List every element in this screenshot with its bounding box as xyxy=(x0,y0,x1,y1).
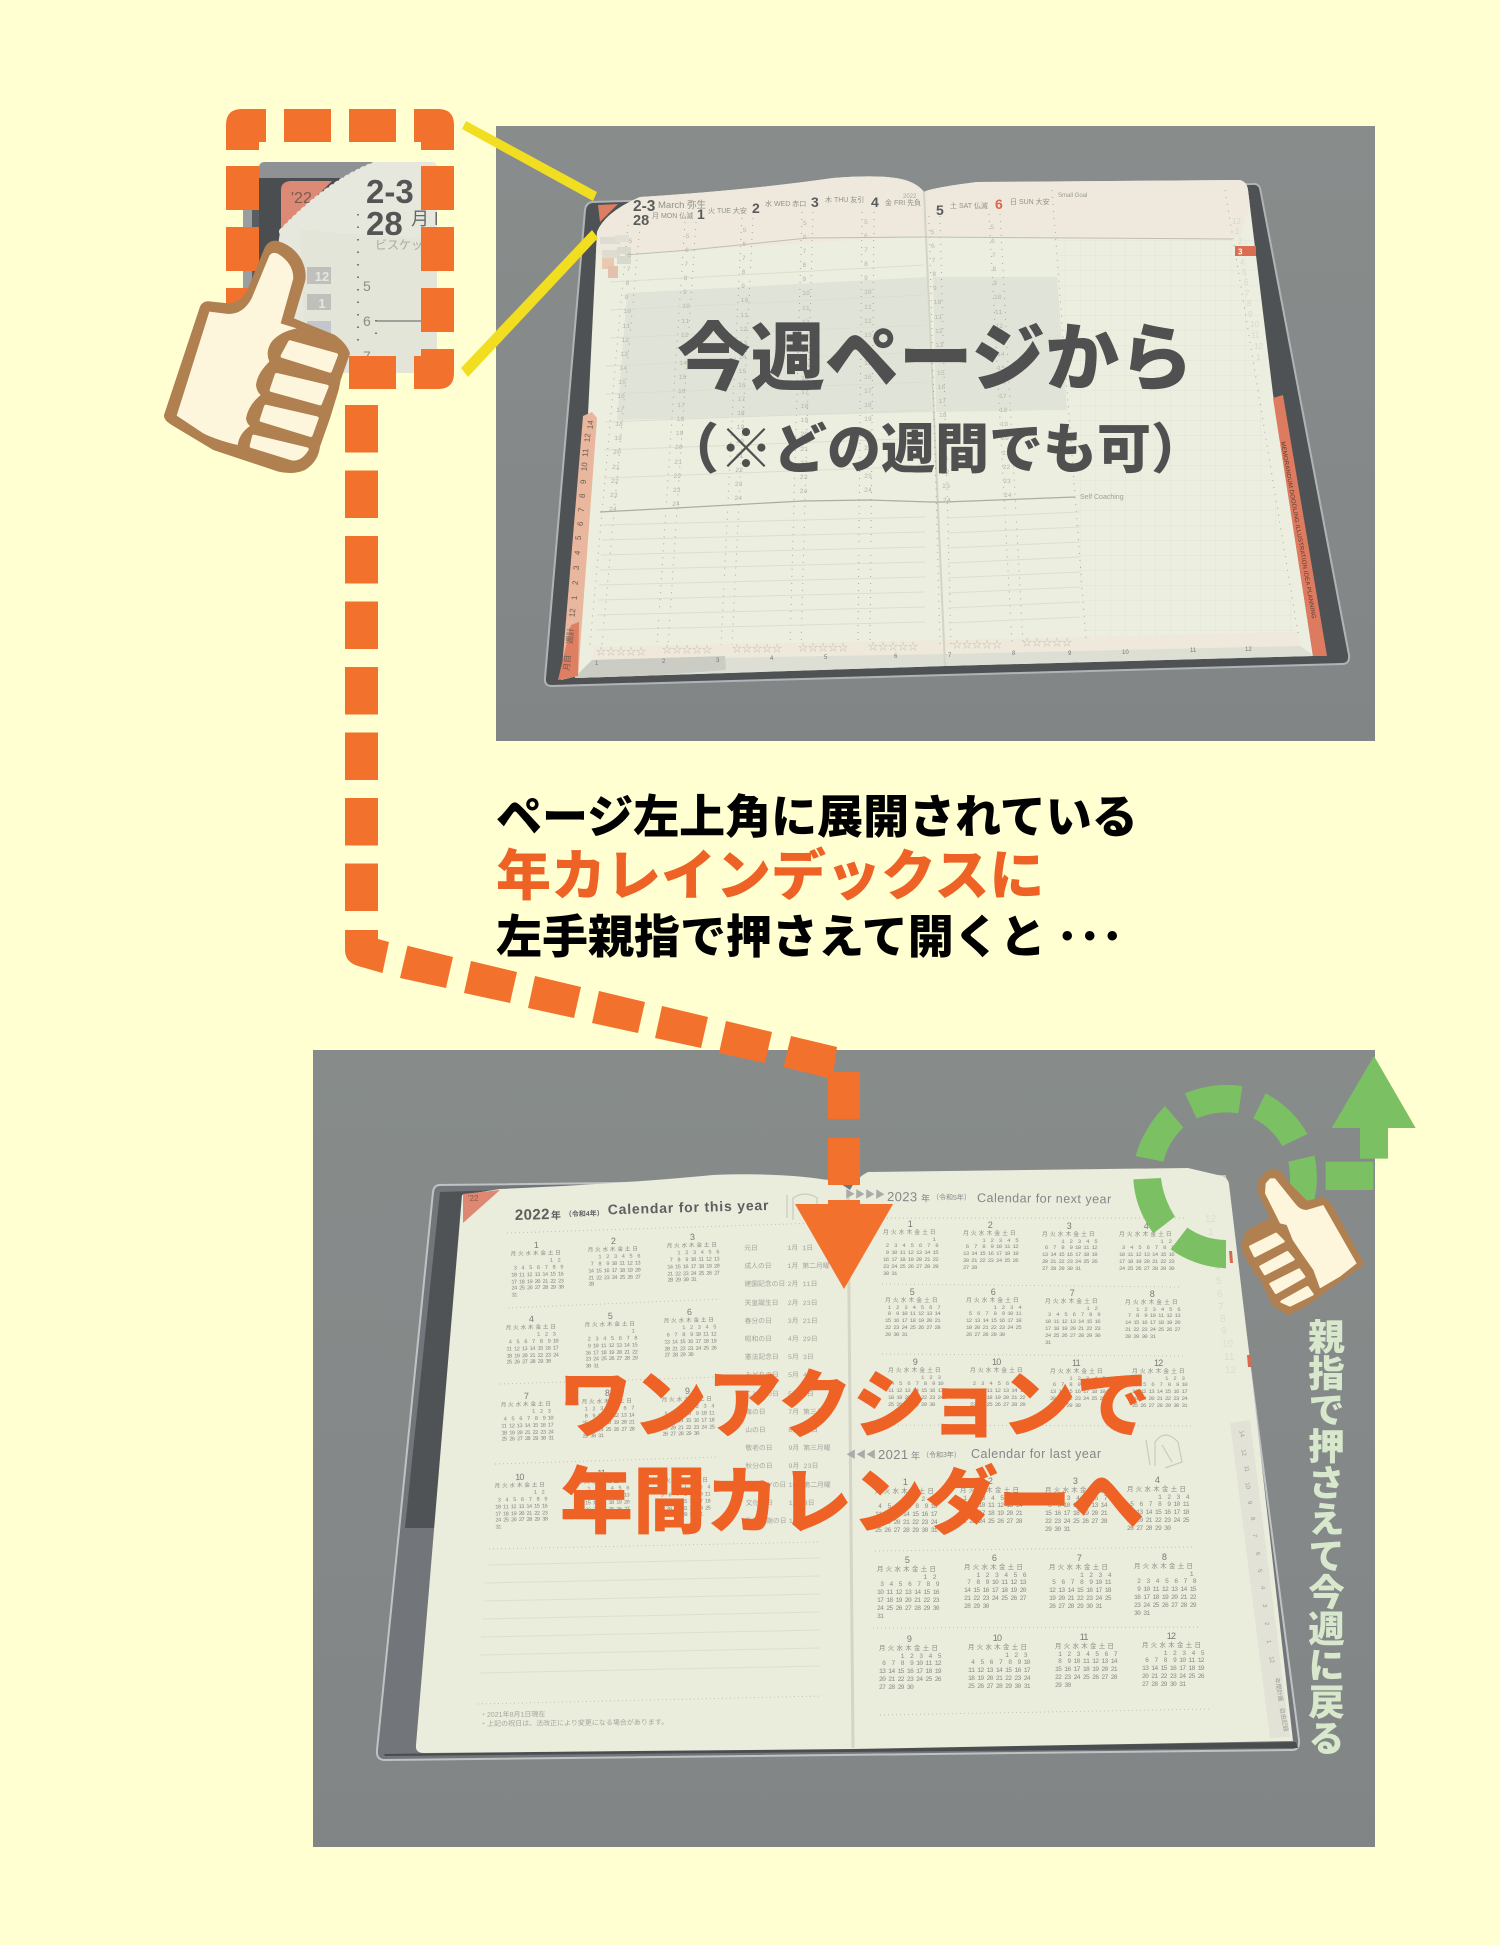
heading: start from this week's page: 今週ページから xyxy=(677,317,1193,400)
faint month index on right margin: 1 xyxy=(1256,353,1261,362)
star ratings row xyxy=(596,637,1072,658)
faint month index on right margin: 6 xyxy=(1244,278,1249,287)
left month index tabs: 10 xyxy=(580,461,589,472)
2021 heading: 年 xyxy=(911,1450,920,1461)
calendar 2023: 8 月 火 水 木 金 土 日 1 2 3 4 5 6 7 8 9 10 11 12 13 14 15 16 17 18 19 20 21 22 23 24 25 26 27 28 29 30 31 xyxy=(1125,1289,1180,1340)
subheading: any week is fine: （※どの週間でも可） xyxy=(665,420,1205,480)
calendar 2021: 1 月 火 水 木 金 土 日 1 2 3 4 5 6 7 8 9 10 11 12 13 14 15 16 17 18 19 20 21 22 23 24 25 26 27 28 29 30 31 xyxy=(875,1477,937,1534)
star ratings row: ☆☆☆☆☆ xyxy=(1022,637,1072,649)
calendar 2021: 7 月 火 水 木 金 土 日 1 2 3 4 5 6 7 8 9 10 11 12 13 14 15 16 17 18 19 20 21 22 23 24 25 26 27 28 29 30 31 xyxy=(1049,1553,1111,1610)
corner salmon tab xyxy=(598,204,618,222)
2023 heading: Calendar for next year xyxy=(977,1191,1112,1206)
calendar 2022: 11 月 火 水 木 金 土 日 1 2 3 4 5 6 7 8 9 10 11 12 13 14 15 16 17 18 19 20 21 22 23 24 25 26 27 28 29 30 xyxy=(577,1468,629,1520)
right page month index: 12 xyxy=(1267,1656,1275,1664)
left month index tabs: 3 xyxy=(572,565,581,570)
hour labels on weekly columns: 5 6 7 8 9 10 11 12 13 14 15 16 17 18 19 20 21 22 23 24 xyxy=(864,219,872,494)
hour labels on weekly columns: 5 6 7 8 9 10 11 12 13 14 15 16 17 18 19 20 21 22 23 24 xyxy=(609,238,633,513)
zoomed inset of page corner: 28 xyxy=(366,205,403,242)
calendar 2021: 6 月 火 水 木 金 土 日 1 2 3 4 5 6 7 8 9 10 11 12 13 14 15 16 17 18 19 20 21 22 23 24 25 26 27 28 29 30 xyxy=(964,1553,1026,1610)
calendar 2021: 4 月 火 水 木 金 土 日 1 2 3 4 5 6 7 8 9 10 11 12 13 14 15 16 17 18 19 20 21 22 23 24 25 26 27 28 29 30 xyxy=(1127,1475,1189,1532)
faint month index on right margin: 5 xyxy=(1242,268,1247,277)
header: date row: 2 xyxy=(752,200,760,216)
corner salmon tab: '22 xyxy=(468,1194,479,1203)
star ratings row: ☆☆☆☆☆ xyxy=(798,642,848,654)
bottom hour scale: 8 xyxy=(1012,651,1016,657)
2021 heading: 2021 xyxy=(878,1447,909,1462)
2023 heading: （令和5年） xyxy=(932,1192,971,1202)
faint month numbers on page edge: 5 xyxy=(1216,1276,1222,1287)
footnote: ・上記の祝日は、法改正により変更になる場合があります。 xyxy=(480,1717,668,1728)
faint month index on right margin: 1 xyxy=(1235,227,1240,236)
left month index tabs: 2 xyxy=(571,580,580,585)
right page month index: 2 xyxy=(1263,1622,1269,1627)
zoomed inset of page corner xyxy=(243,162,449,373)
header: date row: 火 TUE 大安 xyxy=(708,206,747,215)
header: date row: 3 xyxy=(811,194,819,210)
red edge ticks xyxy=(1229,1251,1252,1367)
heading: one action to the annual calendar: 年間カレンダーへ xyxy=(560,1462,1144,1543)
zoomed inset of page corner: '22 xyxy=(291,190,312,207)
right page month index: 4 xyxy=(1259,1586,1265,1591)
orange dashed frame around inset xyxy=(226,109,454,389)
faint month numbers on page edge xyxy=(1205,1214,1237,1376)
faint month numbers on page edge: 6 xyxy=(1217,1289,1223,1300)
faint month index on right margin: 11 xyxy=(1251,331,1260,340)
bottom hour scale: 11 xyxy=(1190,648,1197,654)
right page month index: 12 xyxy=(1239,1449,1247,1457)
yellow zoom callout lines xyxy=(461,121,598,377)
faint month numbers on page edge: 7 xyxy=(1218,1302,1224,1313)
faint month numbers on page edge: 12 xyxy=(1205,1214,1217,1225)
calendar 2023: 3 月 火 水 木 金 土 日 1 2 3 4 5 6 7 8 9 10 11 12 13 14 15 16 17 18 19 20 21 22 23 24 25 26 27 28 29 30 31 xyxy=(1042,1221,1097,1272)
national holidays table xyxy=(744,1244,831,1526)
calendar 2022: 8 月 火 水 木 金 土 日 1 2 3 4 5 6 7 8 9 10 11 12 13 14 15 16 17 18 19 20 21 22 23 24 25 26 27 28 29 30 31 xyxy=(582,1388,634,1440)
footnote xyxy=(480,1708,668,1728)
calendar 2021 xyxy=(875,1475,1204,1691)
2021 heading: （令和3年） xyxy=(922,1450,961,1459)
calendar 2023: 10 月 火 水 木 金 土 日 1 2 3 4 5 6 7 8 9 10 11 12 13 14 15 16 17 18 19 20 21 22 23 24 25 26 27 28 29 30 31 xyxy=(970,1357,1025,1415)
header: date row: 2-3 xyxy=(633,198,656,215)
zoomed inset of page corner: 2-3 xyxy=(366,173,414,210)
calendar 2022: 4 月 火 水 木 金 土 日 1 2 3 4 5 6 7 8 9 10 11 12 13 14 15 16 17 18 19 20 21 22 23 24 25 26 27 28 29 30 xyxy=(506,1314,558,1366)
left month index tabs: 14 xyxy=(586,419,595,430)
footnote: ・2021年8月1日現在 xyxy=(480,1709,545,1719)
instruction text xyxy=(496,791,1138,963)
faint month numbers on page edge: 12 xyxy=(1225,1365,1237,1376)
overlay: callouts, dashed path, icons and headings xyxy=(164,109,1416,1535)
2022 heading: （令和4年） xyxy=(565,1209,604,1219)
instruction text: 年カレインデックスに xyxy=(496,845,1044,907)
right page month index: 8 xyxy=(1249,1517,1255,1522)
right page month index: 6 xyxy=(1254,1552,1260,1557)
small year tabs xyxy=(600,235,631,278)
planner cover xyxy=(545,184,1349,686)
right page month index: 自由記録 xyxy=(1278,1707,1290,1732)
calendar 2023: 4 月 火 水 木 金 土 日 1 2 3 4 5 6 7 8 9 10 11 12 13 14 15 16 17 18 19 20 21 22 23 24 25 26 27 28 29 30 xyxy=(1119,1221,1174,1272)
calendar 2021: 8 月 火 水 木 金 土 日 1 2 3 4 5 6 7 8 9 10 11 12 13 14 15 16 17 18 19 20 21 22 23 24 25 26 27 28 29 30 31 xyxy=(1134,1552,1196,1617)
header: date row: 日 SUN 大安 xyxy=(1010,197,1050,206)
faint month numbers on page edge: 10 xyxy=(1222,1339,1234,1350)
bottom hour scale: 10 xyxy=(1122,650,1129,656)
calendar 2022: 12 月 火 水 木 金 土 日 1 2 3 4 5 6 7 8 9 10 11 12 13 14 15 16 17 18 19 20 21 22 23 24 25 26 27 28 29 30 31 xyxy=(658,1467,710,1519)
zoomed inset of page corner: 12 xyxy=(315,269,329,284)
left month index tabs: 12 xyxy=(583,432,592,443)
right page month index: 9 xyxy=(1246,1501,1252,1506)
instruction text: ページ左上角に展開されている xyxy=(496,791,1138,843)
calendar 2022: 6 月 火 水 木 金 土 日 1 2 3 4 5 6 7 8 9 10 11 12 13 14 15 16 17 18 19 20 21 22 23 24 25 26 27 28 29 30 xyxy=(664,1307,716,1359)
faint month index on right margin: 12 xyxy=(1232,217,1241,226)
right page month index: 1 xyxy=(1265,1640,1271,1645)
bottom hour scale: 6 xyxy=(894,654,898,660)
right salmon strip: MEMORANDUM DOODLING ILLUSTRATION IDEA PLANNING xyxy=(1279,441,1316,620)
red month tab xyxy=(1235,246,1256,256)
zoomed inset of page corner: ビスケットの xyxy=(375,238,447,252)
zoomed inset of page corner: 月 M xyxy=(411,209,449,229)
zoomed inset of page corner: 1 xyxy=(318,296,326,311)
calendar 2021: 9 月 火 水 木 金 土 日 1 2 3 4 5 6 7 8 9 10 11 12 13 14 15 16 17 18 19 20 21 22 23 24 25 26 27 28 29 30 xyxy=(879,1634,941,1691)
vertical label: press with thumb to return to this week: 親指で押さえて今週に戻る xyxy=(1303,1318,1344,1756)
star ratings row: ☆☆☆☆☆ xyxy=(732,643,782,655)
bottom hour scale: 5 xyxy=(824,655,828,661)
photo panel: yearly calendar spread of the planner xyxy=(313,1050,1375,1847)
calendar 2022: 9 月 火 水 木 金 土 日 1 2 3 4 5 6 7 8 9 10 11 12 13 14 15 16 17 18 19 20 21 22 23 24 25 26 27 28 29 30 xyxy=(662,1386,714,1438)
2021 heading: Calendar for last year xyxy=(971,1447,1102,1461)
photo panel: weekly page spread of the planner xyxy=(496,126,1375,741)
star ratings row: ☆☆☆☆☆ xyxy=(662,644,712,656)
calendar 2022 xyxy=(494,1232,720,1531)
bottom hour scale: 2 xyxy=(662,659,666,665)
dark inner cover strip xyxy=(405,1190,500,1528)
faint month numbers on page edge: 9 xyxy=(1221,1326,1227,1337)
right page month index xyxy=(1237,1430,1290,1732)
star ratings row: ☆☆☆☆☆ xyxy=(868,641,918,653)
hour labels on weekly columns: 5 6 7 8 9 10 11 12 13 14 15 16 17 18 19 20 21 22 23 24 xyxy=(672,233,690,508)
calendar 2023: 2 月 火 水 木 金 土 日 1 2 3 4 5 6 7 8 9 10 11 12 13 14 15 16 17 18 19 20 21 22 23 24 25 26 27 28 xyxy=(963,1220,1018,1271)
hour labels on weekly columns: 5 6 7 8 9 10 11 12 13 14 15 16 17 18 19 20 21 22 23 24 xyxy=(734,227,749,502)
red month tab: 3 xyxy=(1238,248,1243,256)
left month index tabs: 8 xyxy=(578,493,587,498)
left month index tabs: 12 xyxy=(568,607,577,618)
clear cover xyxy=(377,1176,1299,1760)
right page month index: 10 xyxy=(1243,1482,1251,1490)
2022 heading xyxy=(515,1197,770,1224)
right salmon strip xyxy=(1273,395,1327,656)
star ratings row: ☆☆☆☆☆ xyxy=(952,639,1002,651)
icon: small thumbs up xyxy=(1242,1170,1363,1314)
header: date row: March 弥生 xyxy=(658,199,707,211)
bottom hour scale: 4 xyxy=(770,656,774,662)
calendar 2022: 5 月 火 水 木 金 土 日 1 2 3 4 5 6 7 8 9 10 11 12 13 14 15 16 17 18 19 20 21 22 23 24 25 26 27 28 29 30 31 xyxy=(585,1311,637,1370)
calendar 2023: 5 月 火 水 木 金 土 日 1 2 3 4 5 6 7 8 9 10 11 12 13 14 15 16 17 18 19 20 21 22 23 24 25 26 27 28 29 30 31 xyxy=(885,1287,940,1338)
calendar 2021: 11 月 火 水 木 金 土 日 1 2 3 4 5 6 7 8 9 10 11 12 13 14 15 16 17 18 19 20 21 22 23 24 25 26 27 28 29 30 xyxy=(1055,1632,1117,1689)
header: date row: 2022 xyxy=(903,194,917,200)
calendar 2023: 11 月 火 水 木 金 土 日 1 2 3 4 5 6 7 8 9 10 11 12 13 14 15 16 17 18 19 20 21 22 23 24 25 26 27 28 29 30 xyxy=(1050,1358,1105,1409)
bottom hour scale: 1 xyxy=(595,661,599,667)
heading: one action to the annual calendar xyxy=(558,1364,1150,1543)
calendar 2023: 12 月 火 水 木 金 土 日 1 2 3 4 5 6 7 8 9 10 11 12 13 14 15 16 17 18 19 20 21 22 23 24 25 26 27 28 29 30 31 xyxy=(1132,1358,1187,1409)
calendar 2021: 12 月 火 水 木 金 土 日 1 2 3 4 5 6 7 8 9 10 11 12 13 14 15 16 17 18 19 20 21 22 23 24 25 26 27 28 29 30 31 xyxy=(1142,1631,1204,1688)
icon: large thumbs up xyxy=(164,241,350,473)
header: date row xyxy=(633,193,1124,501)
bottom hour scale: 12 xyxy=(1245,647,1252,653)
calendar 2021: 3 月 火 水 木 金 土 日 1 2 3 4 5 6 7 8 9 10 11 12 13 14 15 16 17 18 19 20 21 22 23 24 25 26 27 28 29 30 31 xyxy=(1045,1476,1107,1533)
bottom hour scale: 9 xyxy=(1068,651,1072,657)
faint month index on right margin: 10 xyxy=(1250,320,1259,329)
calendar 2022: 3 月 火 水 木 金 土 日 1 2 3 4 5 6 7 8 9 10 11 12 13 14 15 16 17 18 19 20 21 22 23 24 25 26 27 28 29 30 31 xyxy=(667,1232,719,1284)
faint month numbers on page edge: 1 xyxy=(1208,1227,1214,1238)
faint month numbers on page edge: 11 xyxy=(1224,1352,1235,1363)
green dashed return arc and up arrow xyxy=(1133,1056,1416,1268)
right page month index: 11 xyxy=(1242,1465,1250,1473)
zoomed inset of page corner: 6 xyxy=(363,313,371,329)
bottom hour scale: 3 xyxy=(716,658,720,664)
2022 heading: 2022 xyxy=(515,1206,550,1224)
left month index tabs: 月目 xyxy=(562,654,573,671)
right page month index: 14 xyxy=(1237,1430,1245,1438)
right page month index: 5 xyxy=(1256,1569,1262,1574)
calendar 2022: 1 月 火 水 木 金 土 日 1 2 3 4 5 6 7 8 9 10 11 12 13 14 15 16 17 18 19 20 21 22 23 24 25 26 27 28 29 30 31 xyxy=(511,1240,563,1299)
faint month index on right margin: 2 xyxy=(1238,237,1243,246)
header: date row: 木 THU 友引 xyxy=(825,195,864,204)
2022 heading: 年 xyxy=(551,1209,561,1222)
bottom hour scale: 7 xyxy=(948,653,952,659)
2021 heading: ◀◀◀ xyxy=(846,1449,876,1461)
left month index tabs: 6 xyxy=(576,521,585,526)
header: date row: 5 xyxy=(936,202,944,218)
calendar 2023: 6 月 火 水 木 金 土 日 1 2 3 4 5 6 7 8 9 10 11 12 13 14 15 16 17 18 19 20 21 22 23 24 25 26 27 28 29 30 xyxy=(966,1287,1021,1338)
faint month index on right margin: 7 xyxy=(1245,289,1250,298)
weekly pages xyxy=(570,170,1320,682)
heading: one action to the annual calendar: ワンアクションで xyxy=(558,1364,1150,1447)
left month index tabs: 11 xyxy=(581,448,590,457)
2023 heading: 2023 xyxy=(887,1189,918,1204)
calendar 2023: 7 月 火 水 木 金 土 日 1 2 3 4 5 6 7 8 9 10 11 12 13 14 15 16 17 18 19 20 21 22 23 24 25 26 27 28 29 30 31 xyxy=(1045,1288,1100,1346)
national holidays table: 元日 成人の日 建国記念の日 天皇誕生日 春分の日 昭和の日 憲法記念日 みどりの日 こどもの日 海の日 山の日 敬老の日 秋分の日 スポーツの日 文化の日 勤労感謝の日 xyxy=(744,1245,787,1526)
zoomed inset of page corner: 7 xyxy=(363,348,371,364)
calendar 2023 xyxy=(883,1219,1188,1415)
faint month index on right margin: 9 xyxy=(1248,310,1253,319)
national holidays table: 1月 1月 2月 2月 3月 4月 5月 5月 5月 7月 8月 9月 9月 10月 11月 11月 xyxy=(787,1245,804,1526)
left month index tabs: 1 xyxy=(570,595,579,600)
left month index tabs: 5 xyxy=(574,535,583,540)
left month index tabs: 4 xyxy=(573,550,582,555)
header: date row: Small Goal xyxy=(1058,193,1087,199)
notebook sketch icons xyxy=(787,1194,1182,1468)
calendar 2022: 7 月 火 水 木 金 土 日 1 2 3 4 5 6 7 8 9 10 11 12 13 14 15 16 17 18 19 20 21 22 23 24 25 26 27 28 29 30 31 xyxy=(501,1391,553,1443)
faint month index on right margin: 12 xyxy=(1254,342,1263,351)
header: date row: 4 xyxy=(871,194,879,210)
header: date row: 1 xyxy=(697,206,705,222)
2021 heading xyxy=(846,1447,1102,1462)
calendar 2021: 2 月 火 水 木 金 土 日 1 2 3 4 5 6 7 8 9 10 11 12 13 14 15 16 17 18 19 20 21 22 23 24 25 26 27 28 xyxy=(960,1476,1022,1525)
left month index tabs: 9 xyxy=(579,479,588,484)
hour labels on weekly columns xyxy=(609,219,1012,513)
star ratings row: ☆☆☆☆☆ xyxy=(596,646,646,658)
calendar 2021: 10 月 火 水 木 金 土 日 1 2 3 4 5 6 7 8 9 10 11 12 13 14 15 16 17 18 19 20 21 22 23 24 25 26 27 28 29 30 31 xyxy=(968,1633,1030,1690)
hour labels on weekly columns: 5 6 7 8 9 10 11 12 13 14 15 16 17 18 19 20 21 22 23 24 xyxy=(990,224,1012,499)
header: date row: 6 xyxy=(995,196,1003,212)
faint month index on right margin: 8 xyxy=(1247,299,1252,308)
faint month numbers on page edge: 4 xyxy=(1215,1262,1221,1273)
header: date row: 土 SAT 仏滅 xyxy=(950,201,988,210)
2023 heading xyxy=(845,1189,1112,1206)
faint month index on right margin: 4 xyxy=(1240,258,1245,267)
header: date row: 28 xyxy=(633,213,649,229)
orange down arrow head xyxy=(795,1204,893,1289)
header: date row: 金 FRI 先負 xyxy=(885,198,921,207)
2023 heading: 年 xyxy=(921,1192,930,1203)
bottom hour scale xyxy=(595,647,1252,667)
instruction text: 左手親指で押さえて開くと xyxy=(496,911,1046,963)
calendar 2022: 2 月 火 水 木 金 土 日 1 2 3 4 5 6 7 8 9 10 11 12 13 14 15 16 17 18 19 20 21 22 23 24 25 26 27 28 xyxy=(588,1236,640,1288)
calendar 2021: 5 月 火 水 木 金 土 日 1 2 3 4 5 6 7 8 9 10 11 12 13 14 15 16 17 18 19 20 21 22 23 24 25 26 27 28 29 30 31 xyxy=(877,1555,939,1620)
national holidays table: 1日 第二月曜 11日 23日 21日 29日 3日 4日 5日 第三月曜 11日 第三月曜 23日 第二月曜 3日 23日 xyxy=(802,1245,831,1526)
calendar 2022: 10 月 火 水 木 金 土 日 1 2 3 4 5 6 7 8 9 10 11 12 13 14 15 16 17 18 19 20 21 22 23 24 25 26 27 28 29 30 31 xyxy=(495,1472,547,1531)
2023 heading: ▶▶▶▶ xyxy=(845,1189,885,1201)
left month index tabs xyxy=(558,412,597,680)
hour labels on weekly columns: 5 6 7 8 9 10 11 12 13 14 15 16 17 18 19 20 21 22 23 24 xyxy=(800,220,810,495)
right page month index: 3 xyxy=(1261,1604,1267,1609)
hour labels on weekly columns: 5 6 7 8 9 10 11 12 13 14 15 16 17 18 19 20 21 22 23 24 xyxy=(930,229,951,504)
left month index tabs: 7 xyxy=(577,507,586,512)
2022 heading: Calendar for this year xyxy=(608,1197,769,1217)
faint month index on right margin xyxy=(1232,217,1263,362)
orange dashed path to the lower photo xyxy=(345,405,860,1210)
faint month numbers on page edge: 8 xyxy=(1220,1314,1226,1325)
header: date row: 水 WED 赤口 xyxy=(765,199,806,208)
calendar 2023: 9 月 火 水 木 金 土 日 1 2 3 4 5 6 7 8 9 10 11 12 13 14 15 16 17 18 19 20 21 22 23 24 25 26 27 28 29 30 xyxy=(888,1357,943,1408)
calendar pages xyxy=(416,1168,1293,1753)
right page month index: 7 xyxy=(1251,1534,1257,1539)
header: date row: 月 MON 仏滅 xyxy=(652,211,693,220)
calendar 2023: 1 月 火 水 木 金 土 日 1 2 3 4 5 6 7 8 9 10 11 12 13 14 15 16 17 18 19 20 21 22 23 24 25 26 27 28 29 30 31 xyxy=(883,1219,938,1277)
instruction text: ･･･ xyxy=(1056,912,1124,963)
zoomed inset of page corner: 5 xyxy=(363,278,371,294)
left month index tabs: 週計 xyxy=(564,627,576,644)
corner salmon tab xyxy=(463,1190,500,1223)
header: date row: Self Coaching xyxy=(1080,494,1124,501)
right page month index: 年間計画 xyxy=(1273,1677,1285,1702)
